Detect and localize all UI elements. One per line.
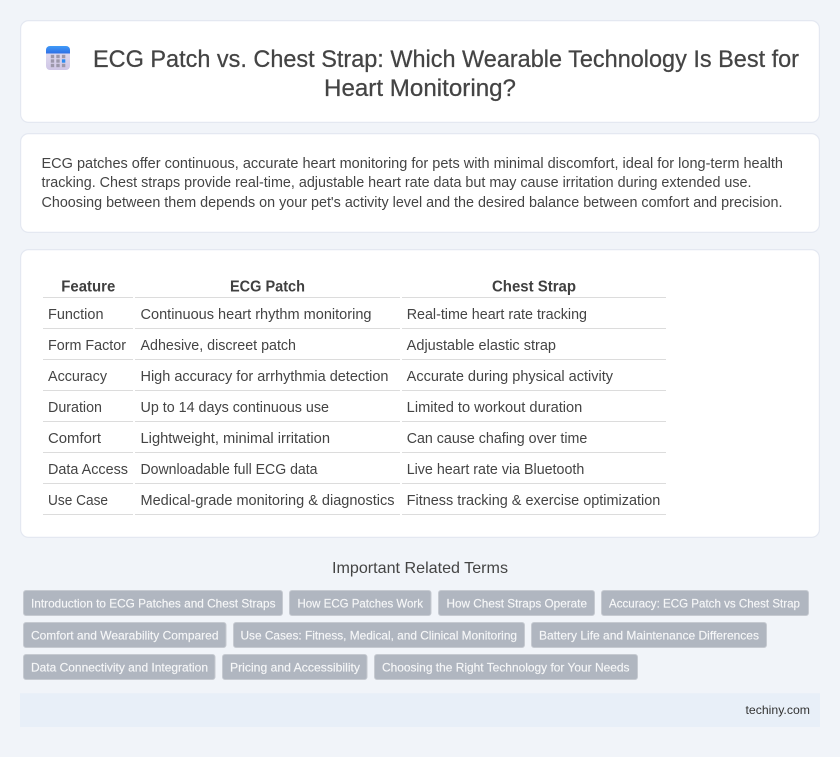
row: function: [48, 307, 587, 323]
row: data access: Downloadable full ECG data: [140, 462, 318, 478]
title: ECG Patch vs. Chest Strap: Which Wearable Technology Is Best for: [93, 46, 799, 73]
tag: Comfort and Wearability Compared: [31, 628, 218, 642]
tag: [24, 654, 215, 680]
panel: comparison table: [21, 250, 819, 537]
tag: [24, 622, 226, 648]
row: use case: Use Case: [48, 493, 108, 509]
tag: Battery Life and Maintenance Differences: [539, 628, 759, 642]
tag: [24, 590, 282, 616]
row: form factor: [48, 338, 556, 354]
table header: [61, 278, 576, 295]
row: accuracy: [48, 369, 614, 385]
row: duration: [48, 400, 582, 416]
tag: Data Connectivity and Integration: [31, 660, 208, 674]
table header: ECG Patch: [230, 278, 305, 295]
footer: [20, 693, 820, 727]
row: comfort: Can cause chafing over time: [407, 431, 587, 447]
tag: How ECG Patches Work: [298, 596, 424, 610]
row: duration: Limited to workout duration: [407, 400, 582, 416]
tag: [290, 590, 431, 616]
table header: Chest Strap: [492, 278, 576, 295]
tag: [602, 590, 808, 616]
row: data access: Live heart rate via Bluetooth: [407, 462, 584, 478]
tag: Introduction to ECG Patches and Chest Straps: [31, 596, 276, 610]
row: data access: [48, 462, 584, 478]
row: form factor: Adjustable elastic strap: [407, 338, 556, 354]
row: comfort: Lightweight, minimal irritation: [140, 431, 330, 447]
summary text: tracking. Chest straps provide real-time, adjustable heart rate data but may cause irritation during extended use.: [42, 175, 752, 191]
icon: calendar: [46, 46, 70, 70]
row: form factor: Form Factor: [48, 338, 126, 354]
row: function: Function: [48, 307, 104, 323]
tag: Choosing the Right Technology for Your Needs: [382, 660, 630, 674]
row: use case: Medical-grade monitoring & diagnostics: [140, 493, 394, 509]
row: duration: Up to 14 days continuous use: [140, 400, 329, 416]
tags: related terms: [24, 590, 808, 680]
table header: Feature: [61, 278, 116, 295]
summary text: [42, 156, 783, 211]
tag: [234, 622, 524, 648]
tag: How Chest Straps Operate: [446, 596, 587, 610]
row: duration: Duration: [48, 400, 102, 416]
row: data access: Data Access: [48, 462, 128, 478]
row: accuracy: Accuracy: [48, 369, 108, 385]
summary text: ECG patches offer continuous, accurate heart monitoring for pets with minimal discomfort, ideal for long-term health: [42, 156, 783, 172]
tag: [438, 590, 594, 616]
title: Heart Monitoring?: [324, 75, 516, 102]
row: function: Continuous heart rhythm monitoring: [140, 307, 372, 323]
row: accuracy: Accurate during physical activity: [407, 369, 614, 385]
tag: [222, 654, 367, 680]
row: function: Real-time heart rate tracking: [407, 307, 587, 323]
footer: techiny.com: [746, 703, 810, 717]
panel: title card: [21, 21, 819, 122]
tag: Pricing and Accessibility: [230, 660, 360, 674]
row: comfort: Comfort: [48, 431, 101, 447]
tag: Use Cases: Fitness, Medical, and Clinical Monitoring: [240, 628, 517, 642]
tag: Accuracy: ECG Patch vs Chest Strap: [609, 596, 800, 610]
title: [93, 46, 799, 102]
row: use case: Fitness tracking & exercise optimization: [407, 493, 660, 509]
tag: [532, 622, 766, 648]
row: use case: [48, 493, 660, 509]
tag: [374, 654, 638, 680]
row: accuracy: High accuracy for arrhythmia detection: [140, 369, 388, 385]
row: form factor: Adhesive, discreet patch: [140, 338, 296, 354]
row: comfort: [48, 431, 587, 447]
summary text: Choosing between them depends on your pet's activity level and the desired balance between comfort and precision.: [42, 195, 782, 211]
panel: summary: [21, 134, 819, 232]
heading: important related terms: Important Related Terms: [332, 560, 508, 577]
